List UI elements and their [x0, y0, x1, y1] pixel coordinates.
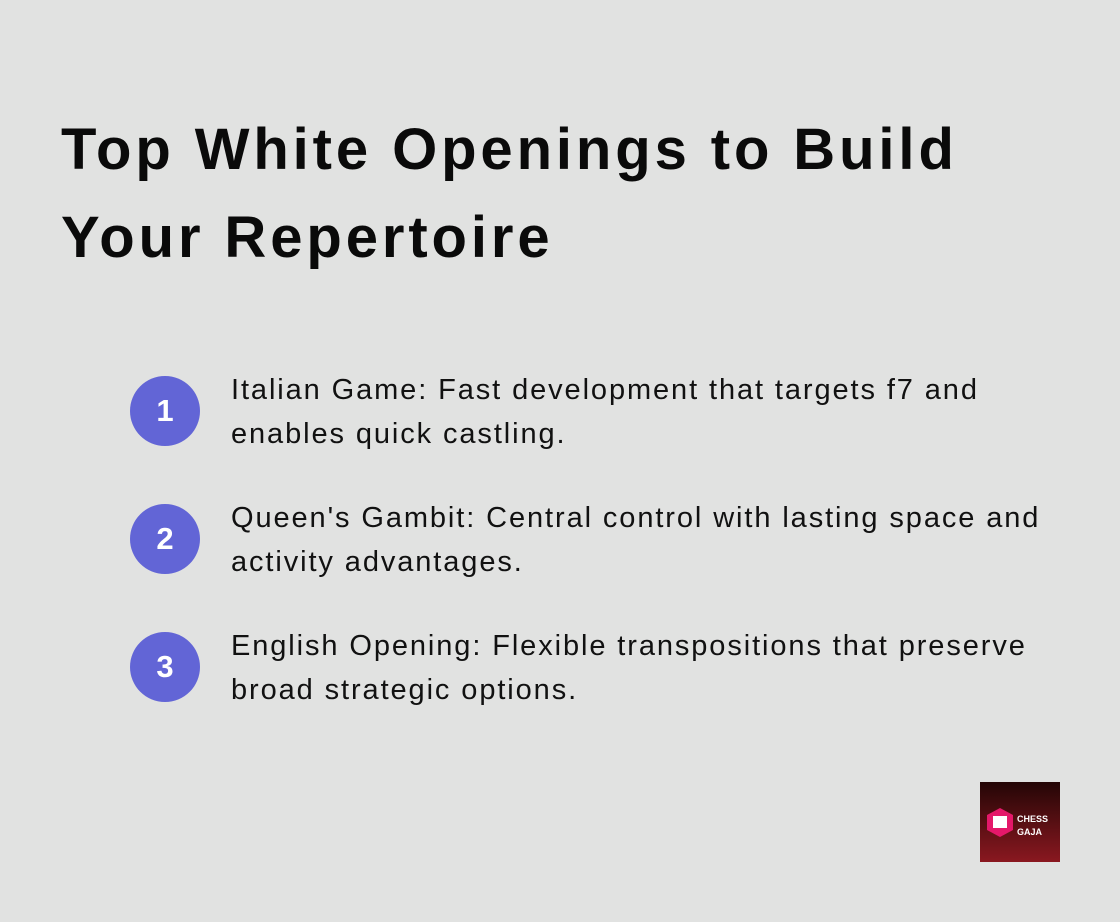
badge 3: 3 — [156, 649, 174, 684]
badge 2: 2 — [156, 521, 174, 556]
badge 1: 1 — [156, 393, 174, 428]
text 3: English Opening: Flexible transpositions that preserve — [231, 630, 1027, 662]
item 2 — [130, 502, 1040, 578]
text 3: broad strategic options. — [231, 674, 578, 706]
text 2: activity advantages. — [231, 546, 524, 578]
text 2: Queen's Gambit: Central control with lasting space and — [231, 502, 1040, 534]
item 3 — [130, 630, 1027, 706]
item 1 — [130, 374, 979, 450]
title: Top White Openings to Build — [61, 117, 958, 182]
logo: CHESS — [1017, 814, 1048, 824]
badge 1 — [130, 376, 200, 446]
text 1 — [231, 374, 979, 450]
text 3 — [231, 630, 1027, 706]
logo: GAJA — [1017, 827, 1043, 837]
text 1: Italian Game: Fast development that targets f7 and — [231, 374, 979, 406]
badge 2 — [130, 504, 200, 574]
logo — [980, 782, 1060, 862]
title — [61, 117, 958, 270]
badge 3 — [130, 632, 200, 702]
title: Your Repertoire — [61, 205, 554, 270]
text 2 — [231, 502, 1040, 578]
text 1: enables quick castling. — [231, 418, 566, 450]
